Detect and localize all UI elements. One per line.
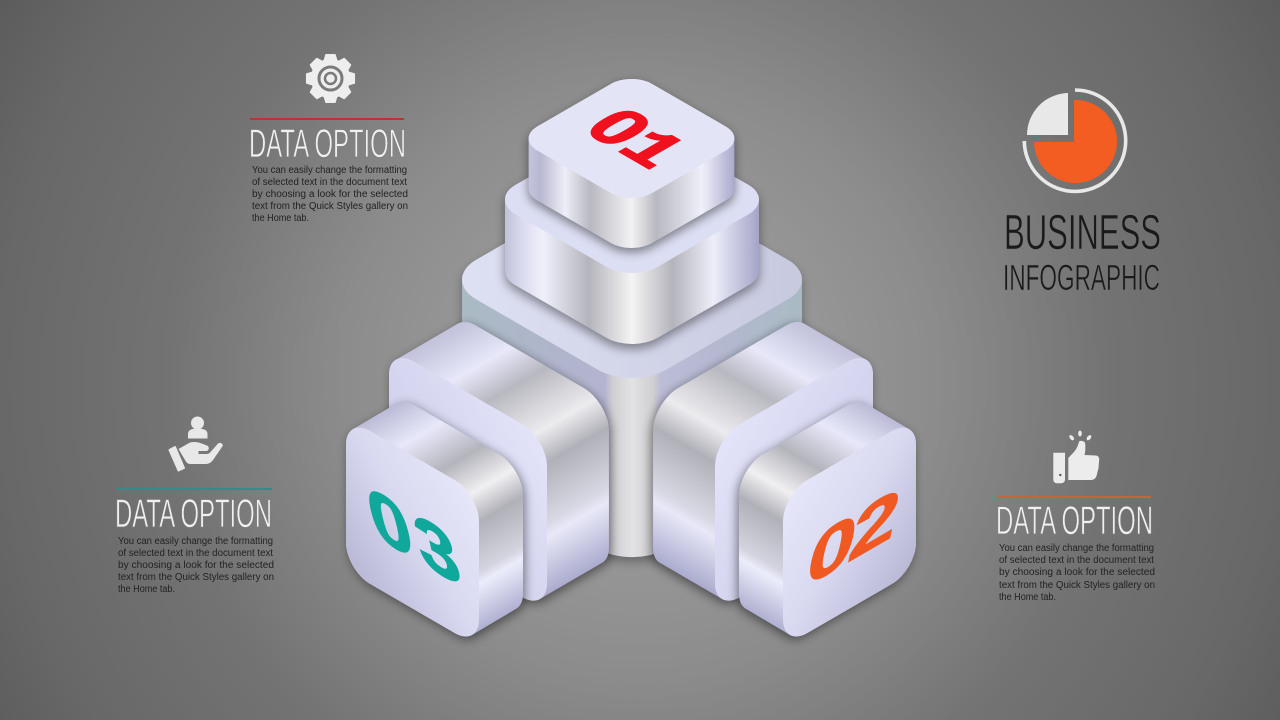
panel: option right [996,430,1155,603]
body text [999,543,1155,603]
body text: of selected text in the document text [999,555,1154,566]
number 03: 03 [359,467,473,607]
body text: You can easily change the formatting [252,165,407,176]
divider teal [116,488,272,490]
number 02: 02 [799,471,905,604]
icon: gear [307,55,354,102]
body text: the Home tab. [118,584,175,595]
body text: by choosing a look for the selected [252,189,408,200]
title: INFOGRAPHIC [1003,257,1160,298]
panel: option top left [249,55,408,224]
divider red [250,118,404,120]
top block 01 [522,78,742,258]
icon: thumbs up [1053,430,1099,483]
left arm 03 large block [386,319,618,608]
title [1003,206,1161,298]
body text [252,165,408,224]
heading: DATA OPTION [996,499,1153,543]
body text: of selected text in the document text [252,177,407,188]
number 01: 01 [562,98,706,181]
right arm 02 large block [644,319,876,608]
body text: text from the Quick Styles gallery on [252,201,408,212]
middle tier block [498,176,766,356]
body text: by choosing a look for the selected [999,567,1155,578]
body text: the Home tab. [999,592,1056,603]
body text: You can easily change the formatting [999,543,1154,554]
body text: You can easily change the formatting [118,536,273,547]
panel: option left [115,416,274,595]
heading: DATA OPTION [249,122,406,166]
central column and base plate [458,243,806,566]
body text: text from the Quick Styles gallery on [118,572,274,583]
divider orange [997,496,1151,498]
body text: by choosing a look for the selected [118,560,274,571]
body text: the Home tab. [252,213,309,224]
left arm 03 front block [342,398,532,644]
icon: pie chart [1024,90,1126,191]
heading: DATA OPTION [115,492,272,536]
icon: hand holding person [170,416,223,470]
body text [118,536,274,595]
body text: text from the Quick Styles gallery on [999,580,1155,591]
title: BUSINESS [1004,206,1161,260]
right arm 02 front block [730,398,920,644]
body text: of selected text in the document text [118,548,273,559]
